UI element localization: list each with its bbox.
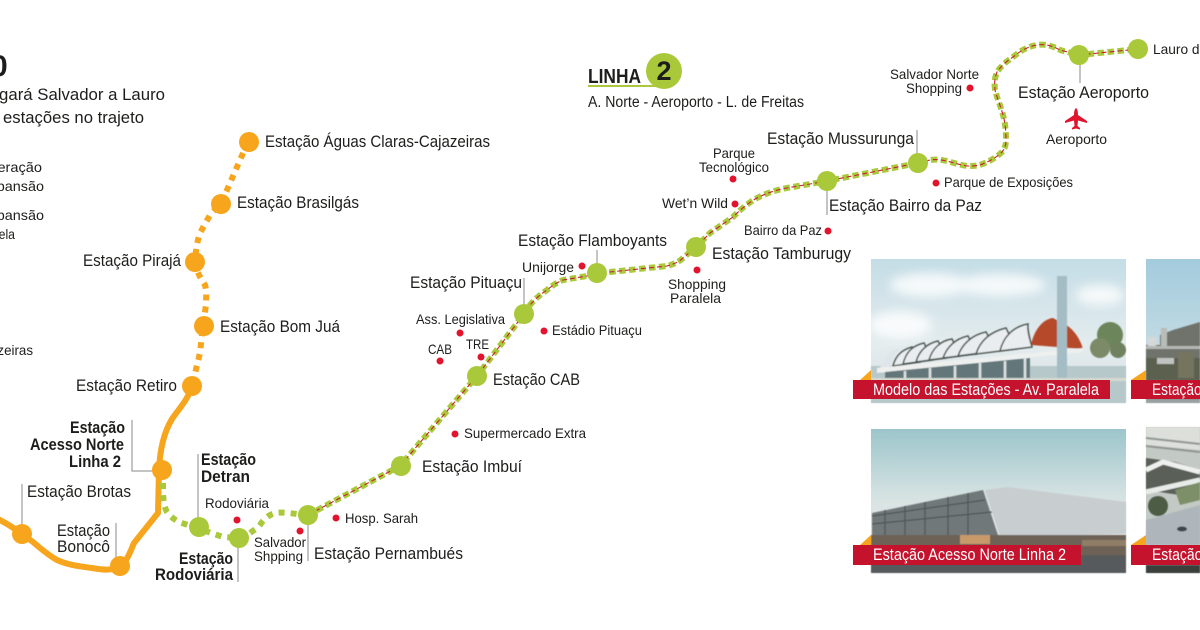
label: Estação Rodoviária — [155, 550, 234, 584]
points of interest: red dots — [234, 84, 974, 534]
label: Estação Acesso Norte Linha 2: Estação — [70, 419, 125, 437]
labels: points of interest: Tecnológico — [699, 159, 769, 175]
caption: Modelo das Estações: Modelo das Estações - Av. Paralela — [873, 381, 1100, 399]
labels: line 1 stations — [27, 132, 490, 556]
photo: station model, Av. Paralela — [868, 259, 1126, 403]
labels: line 2 stations: Estação Aeroporto — [1018, 83, 1149, 102]
labels: line 1 stations: Estação Pirajá — [83, 251, 181, 270]
labels: points of interest: Shpping — [254, 548, 303, 564]
labels: line 2 stations: Estação Bairro da Paz — [829, 196, 982, 215]
labels: points of interest: TRE — [466, 336, 489, 352]
labels: points of interest: Shopping — [668, 276, 726, 292]
label: Estação Rodoviária: Estação — [179, 550, 233, 568]
label: Estação Detran: Estação — [201, 451, 256, 469]
caption: second station — [1131, 370, 1200, 399]
legend: line 1 phases (cropped) — [0, 159, 44, 358]
labels: points of interest: Parque de Exposições — [944, 174, 1073, 190]
labels: points of interest: Paralela — [670, 290, 721, 306]
labels: line 1 stations: Estação Brotas — [27, 482, 131, 501]
caption: aerial station — [1131, 535, 1200, 565]
text: line 2 route: A. Norte - Aeroporto - L. de Freitas — [588, 94, 804, 111]
labels: line 1 stations: Bonocô — [57, 537, 110, 556]
labels: line 2 stations: Estação Pituaçu — [410, 273, 522, 292]
labels: points of interest: CAB — [428, 341, 452, 357]
labels: line 2 stations: Estação Pernambués — [314, 544, 463, 563]
labels: points of interest: Estádio Pituaçu — [552, 322, 642, 338]
labels: points of interest: Salvador Norte — [890, 66, 979, 82]
labels: points of interest: Bairro da Paz — [744, 222, 822, 238]
heading: LINHA: LINHA — [588, 66, 641, 88]
label: Estação Detran: Detran — [201, 468, 250, 486]
photo: aerial view of station (cropped) — [1146, 427, 1200, 573]
label: Estação Acesso Norte Linha 2 — [30, 419, 125, 471]
label: Estação Detran — [201, 451, 256, 486]
label: Estação Acesso Norte Linha 2: Acesso Norte — [30, 436, 124, 454]
labels: line 1 stations: Estação Bom Juá — [220, 317, 340, 336]
labels: points of interest: Aeroporto — [1046, 131, 1107, 147]
labels: points of interest: Ass. Legislativa — [416, 311, 505, 327]
labels: line 2 stations: Estação CAB — [493, 370, 580, 389]
stations: line 2 markers — [189, 39, 1148, 548]
labels: line 1 stations: Estação Brasilgás — [237, 193, 359, 212]
labels: points of interest: Unijorge — [522, 259, 574, 275]
labels: points of interest: Parque — [713, 145, 755, 161]
panel: line 1 intro text (cropped) — [0, 50, 165, 358]
labels: line 2 stations — [314, 41, 1200, 563]
labels: line 2 stations: Estação Flamboyants — [518, 231, 667, 250]
line 2 green route — [163, 45, 1138, 538]
panel: line 2 heading — [588, 53, 804, 111]
photo: second station (cropped) — [1146, 259, 1200, 403]
labels: points of interest: Wet’n Wild — [662, 195, 728, 211]
stations: line 1 markers — [12, 132, 259, 576]
labels: line 1 stations: Estação — [57, 521, 110, 540]
labels: points of interest: Shopping — [906, 80, 962, 96]
badge: number 2: 2 — [656, 56, 672, 86]
labels: line 1 stations: Estação Águas Claras-Cajazeiras — [265, 132, 490, 151]
icon: airplane — [1065, 108, 1087, 130]
label: Estação Rodoviária: Rodoviária — [155, 566, 234, 584]
line 1 orange route — [0, 142, 248, 570]
labels: line 2 stations: Estação Mussurunga — [767, 129, 914, 148]
text: line 1 description: estações no trajeto — [3, 108, 144, 127]
photo: Estação Acesso Norte Linha 2 — [871, 429, 1126, 573]
labels: points of interest: Supermercado Extra — [464, 425, 586, 441]
caption: Modelo das Estações — [853, 370, 1110, 399]
labels: points of interest: Hosp. Sarah — [345, 510, 418, 526]
text: line 1 description — [0, 85, 165, 127]
labels: points of interest: Salvador — [254, 534, 306, 550]
label: Estação Acesso Norte Linha 2: Linha 2 — [69, 453, 121, 471]
badge: number 2 — [646, 53, 682, 89]
labels: line 1 stations: Estação Retiro — [76, 376, 177, 395]
labels: line 2 stations: Estação Imbuí — [422, 457, 522, 476]
labels: points of interest: Rodoviária — [205, 495, 269, 511]
labels: line 2 stations: Estação Tamburugy — [712, 244, 851, 263]
labels: points of interest — [205, 66, 1107, 564]
caption: Estação Acesso Norte Linha 2: Estação Acesso Norte Linha 2 — [873, 546, 1066, 564]
caption: Estação Acesso Norte Linha 2 — [853, 535, 1081, 565]
